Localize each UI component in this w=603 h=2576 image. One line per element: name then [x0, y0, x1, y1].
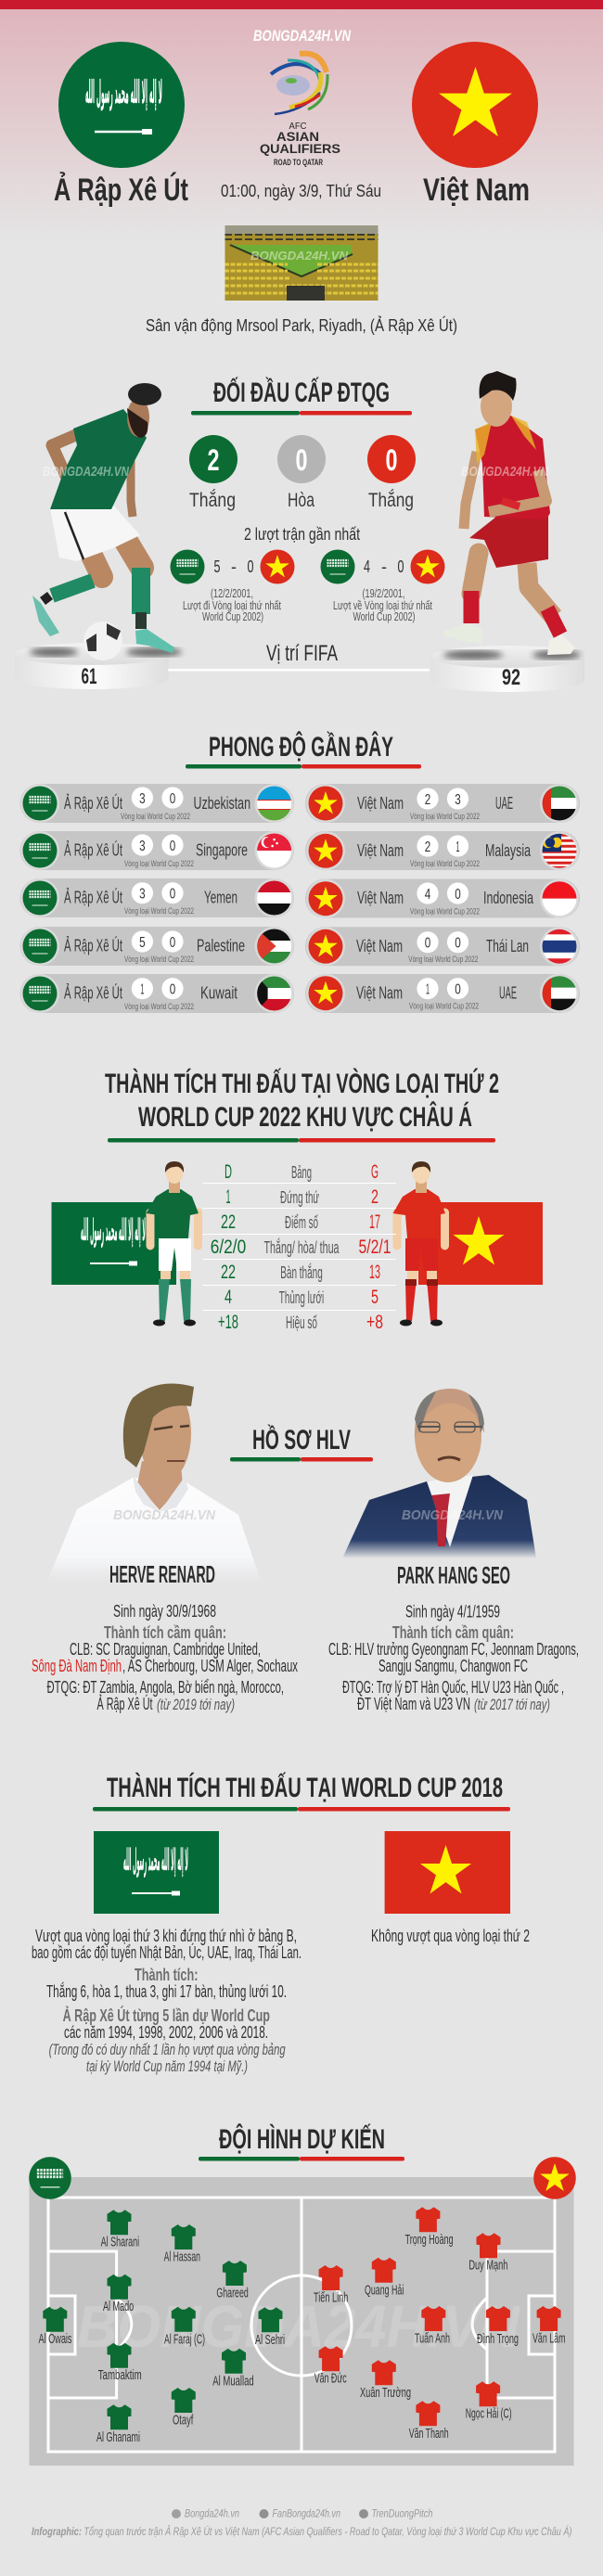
- form row: Saudi vs Uzbekistan: 3: [139, 791, 146, 807]
- form row: Saudi vs Palestine: 0: [170, 935, 175, 951]
- coach bio: Park Hang Seo: ĐT Việt Nam và U23 VN: [357, 1695, 470, 1713]
- match time: 01:00, ngày 3/9, Thứ Sáu: [221, 182, 381, 200]
- AFC Asian Qualifiers logo: [260, 54, 340, 167]
- coach bio: Herve Renard: (từ 2019 tới nay): [157, 1696, 235, 1713]
- statistics table: 22: [221, 1211, 236, 1233]
- statistics table: 4: [225, 1287, 232, 1308]
- 2018 text: Saudi Arabia: các năm 1994, 1998, 2002, 2006 và 2018.: [64, 2023, 268, 2042]
- match result 19/2/2001: (19/2/2001,: [362, 587, 404, 600]
- Vietnam player: Quang Hải: Quang Hải: [365, 2282, 404, 2298]
- text: لا إله إلا الله محمد رسول الله: [81, 1212, 146, 1249]
- coach bio: Herve Renard: ĐTQG: ĐT Zambia, Angola, Bờ biển ngà, Morocco,: [46, 1678, 284, 1697]
- 2018 text: Saudi Arabia: Vượt qua vòng loại thứ 3 khi đứng thứ nhì ở bảng B,: [35, 1927, 297, 1945]
- Vietnam player: Tuấn Anh: Tuấn Anh: [415, 2331, 450, 2347]
- flag: Vietnam: [418, 1202, 543, 1285]
- statistics table: 5: [371, 1287, 378, 1308]
- form row: Vietnam vs Malaysia: [305, 831, 580, 870]
- statistics table: +18: [218, 1312, 238, 1333]
- tally: Saudi wins: [189, 435, 237, 511]
- Vietnam player: Duy Mạnh: [468, 2233, 507, 2274]
- footer social links: Bongda24h.vn: [185, 2508, 239, 2519]
- AFC Asian Qualifiers logo: QUALIFIERS: [260, 141, 340, 156]
- form row: Saudi vs Yemen: [20, 878, 294, 917]
- Vietnam player: Tiến Linh: [314, 2265, 348, 2305]
- coach bio: Herve Renard: , AS Cherbourg, USM Alger, Sochaux: [122, 1657, 298, 1675]
- statistics table: 17: [369, 1211, 380, 1233]
- form row: Vietnam vs Malaysia: Việt Nam: [357, 841, 404, 860]
- tally: Vietnam wins: [367, 435, 416, 511]
- statistics table: Điểm số: [285, 1213, 318, 1232]
- statistics table: 6/2/0: [211, 1237, 246, 1258]
- form row: Saudi vs Kuwait: [20, 974, 294, 1013]
- heading: qualifying round 2: [105, 1068, 499, 1143]
- statistics table: Bảng: [291, 1163, 312, 1182]
- form row: Vietnam vs UAE second: Việt Nam: [356, 983, 403, 1002]
- form row: Vietnam vs Malaysia: 1: [456, 839, 460, 855]
- form row: Vietnam vs Indonesia: Indonesia: [483, 889, 534, 907]
- Saudi player: Ghareed: Ghareed: [216, 2286, 249, 2301]
- coach bio: Park Hang Seo: Sinh ngày 4/1/1959: [405, 1603, 500, 1621]
- Vietnam player: Đình Trọng: Đình Trọng: [477, 2331, 519, 2347]
- Vietnam player: Ngọc Hải: Ngọc Hải (C): [466, 2406, 512, 2422]
- coach portrait: Herve Renard: BONGDA24H.VN: [113, 1507, 216, 1523]
- lineup crest: Saudi Arabia: [29, 2157, 71, 2199]
- Vietnam player: Duy Mạnh: Duy Mạnh: [468, 2258, 507, 2274]
- footer social links: [172, 2508, 432, 2519]
- stadium photo: [225, 225, 378, 301]
- flag: Saudi Arabia: [52, 1202, 176, 1285]
- player: Vietnam: BONGDA24H.VN: [461, 464, 549, 480]
- Saudi player: Otayf: [172, 2388, 196, 2428]
- Saudi player: Al Muallad: [212, 2349, 254, 2389]
- FIFA connector line: [168, 669, 430, 672]
- tally: draws: [277, 435, 326, 511]
- form row: Vietnam vs Thailand: Vòng loại World Cup 2022: [408, 955, 478, 965]
- statistics table: Đứng thứ: [280, 1188, 319, 1207]
- Saudi player: Al Sharani: Al Sharani: [101, 2235, 139, 2250]
- FIFA ranking label: Vị trí FIFA: [266, 641, 338, 666]
- statistics table: Hiệu số: [286, 1314, 317, 1332]
- form row: Vietnam vs Thailand: 0: [425, 936, 430, 952]
- Vietnam player: Xuân Trường: Xuân Trường: [360, 2385, 411, 2401]
- AFC Asian Qualifiers logo: ASIAN: [276, 129, 319, 144]
- form row: Vietnam vs UAE: 3: [455, 792, 461, 808]
- heading: expected lineup: ĐỘI HÌNH DỰ KIẾN: [219, 2123, 385, 2155]
- 2018 text: Saudi Arabia: tại kỳ World Cup năm 1994 tại Mỹ.): [86, 2057, 248, 2075]
- football pitch: [30, 2177, 573, 2466]
- last two matches label: 2 lượt trận gần nhất: [244, 525, 360, 544]
- coach bio: Herve Renard: CLB: SC Draguignan, Cambridge United,: [70, 1640, 261, 1659]
- figure: Vietnam player: [393, 1161, 445, 1326]
- 2018 text: Vietnam: Không vượt qua vòng loại thứ 2: [371, 1927, 530, 1945]
- Vietnam player: Văn Thanh: [409, 2401, 449, 2441]
- coach bio: Park Hang Seo: [328, 1603, 579, 1713]
- Vietnam player: Quang Hải: [365, 2258, 404, 2298]
- form row: Saudi vs Palestine: 5: [139, 935, 146, 951]
- Saudi player: Ghareed: [216, 2261, 249, 2301]
- coach portrait: Herve Renard: [46, 1383, 262, 1583]
- Saudi player: Al Faraj: Al Faraj (C): [164, 2332, 205, 2348]
- Vietnam player: Trọng Hoàng: [405, 2207, 454, 2248]
- stadium photo: BONGDA24H.VN: [250, 249, 349, 263]
- footer caption: Infographic:: [32, 2527, 82, 2538]
- AFC Asian Qualifiers logo: ROAD TO QATAR: [274, 158, 323, 167]
- coach name: Herve Renard: HERVE RENARD: [109, 1560, 215, 1588]
- podium: Vietnam: [430, 646, 584, 692]
- Vietnam player: Tuấn Anh: [415, 2306, 450, 2347]
- form row: Vietnam vs UAE: Vòng loại World Cup 2022: [410, 812, 480, 822]
- coach bio: Herve Renard: Ả Rập Xê Út: [96, 1694, 152, 1713]
- Vietnam player: Văn Lâm: [532, 2306, 566, 2347]
- form row: Vietnam vs Malaysia: 2: [425, 839, 430, 855]
- statistics table: +8: [366, 1312, 383, 1333]
- coach portrait: Park Hang Seo: BONGDA24H.VN: [402, 1507, 504, 1523]
- team name: Vietnam: Việt Nam: [423, 173, 530, 208]
- form row: Vietnam vs Thailand: Thái Lan: [486, 937, 529, 955]
- header: Vietnam crest: [412, 42, 538, 168]
- match result 19/2/2001: [321, 549, 445, 623]
- flag: Vietnam 2018: [385, 1831, 510, 1914]
- stadium caption: Sân vận động Mrsool Park, Riyadh, (Ả Rập Xê Út): [146, 315, 457, 335]
- form row: Saudi vs Singapore: Singapore: [196, 840, 248, 859]
- form row: Vietnam vs Indonesia: Việt Nam: [357, 889, 404, 907]
- coach bio: Park Hang Seo: Thành tích cầm quân:: [392, 1623, 514, 1642]
- form row: Saudi vs Kuwait: 0: [170, 982, 175, 998]
- form row: Saudi vs Palestine: Ả Rập Xê Út: [64, 936, 122, 955]
- Vietnam player: Văn Lâm: Văn Lâm: [532, 2331, 566, 2347]
- tally: Saudi wins: 2: [208, 443, 219, 477]
- 2018 text: Saudi Arabia: [32, 1927, 302, 2075]
- Vietnam player: Trọng Hoàng: Trọng Hoàng: [405, 2232, 454, 2248]
- Saudi player: Al Hassan: [164, 2224, 200, 2264]
- form row: Vietnam vs Malaysia: Vòng loại World Cup 2022: [410, 859, 480, 869]
- coach name: Park Hang Seo: PARK HANG SEO: [397, 1561, 510, 1589]
- 2018 text: Saudi Arabia: Thành tích:: [135, 1966, 199, 1984]
- form row: Vietnam vs UAE second: UAE: [499, 983, 517, 1002]
- Saudi player: Tambaktim: [98, 2343, 142, 2383]
- Saudi player: Al Sharani: [101, 2210, 139, 2250]
- statistics table: 13: [369, 1262, 380, 1283]
- podium: Vietnam: 92: [502, 665, 520, 690]
- match result 12/2/2001: -: [231, 557, 237, 576]
- form row: Saudi vs Uzbekistan: Vòng loại World Cup 2022: [121, 812, 190, 822]
- form row: Saudi vs Singapore: Ả Rập Xê Út: [64, 840, 122, 859]
- heading: recent form: [186, 731, 421, 768]
- tally: Saudi wins: Thắng: [189, 490, 236, 511]
- heading: recent form: PHONG ĐỘ GẦN ĐÂY: [209, 731, 393, 763]
- Saudi player: Al Mado: Al Mado: [103, 2299, 134, 2314]
- coach bio: Park Hang Seo: (từ 2017 tới nay): [474, 1696, 550, 1713]
- form row: Vietnam vs Thailand: 0: [455, 936, 461, 952]
- form row: Vietnam vs UAE second: [305, 974, 580, 1013]
- 2018 text: Saudi Arabia: Ả Rập Xê Út từng 5 lần dự World Cup: [63, 2006, 270, 2025]
- statistics table: G: [371, 1161, 378, 1183]
- form row: Saudi vs Kuwait: 1: [140, 982, 144, 998]
- form row: Saudi vs Yemen: Vòng loại World Cup 2022: [124, 906, 194, 916]
- match result 19/2/2001: Lượt về Vòng loại thứ nhất: [333, 599, 432, 612]
- footer social links: FanBongda24h.vn: [273, 2508, 340, 2519]
- heading: World Cup 2018: [93, 1772, 510, 1811]
- match result 12/2/2001: (12/2/2001,: [211, 587, 253, 600]
- statistics table: 22: [221, 1262, 236, 1283]
- player: Saudi Arabia: [32, 383, 174, 660]
- form row: Vietnam vs UAE second: 1: [426, 982, 430, 998]
- form row: Saudi vs Kuwait: Vòng loại World Cup 2022: [124, 1002, 194, 1012]
- top red bar: [0, 0, 603, 9]
- figure: Saudi player: [147, 1161, 199, 1326]
- statistics table: 1: [226, 1186, 230, 1208]
- form row: Saudi vs Singapore: [20, 831, 294, 870]
- form row: Saudi vs Uzbekistan: Ả Rập Xê Út: [64, 793, 122, 813]
- form row: Saudi vs Yemen: Ả Rập Xê Út: [64, 887, 122, 907]
- form row: Vietnam vs UAE: UAE: [495, 794, 513, 813]
- Saudi player: Al Ghanami: Al Ghanami: [96, 2429, 140, 2445]
- podium: Saudi Arabia: [15, 643, 182, 689]
- statistics table: 5/2/1: [358, 1237, 391, 1258]
- form row: Vietnam vs UAE: Việt Nam: [357, 794, 404, 813]
- Saudi player: Al Faraj: [164, 2307, 205, 2348]
- match result 19/2/2001: World Cup 2002): [353, 610, 416, 623]
- heading: coach profile: HỒ SƠ HLV: [252, 1424, 351, 1455]
- coach bio: Herve Renard: Sinh ngày 30/9/1968: [113, 1602, 216, 1621]
- text: لا إله إلا الله محمد رسول الله: [123, 1842, 188, 1878]
- Vietnam player: Xuân Trường: [360, 2360, 411, 2401]
- top pink gradient: [0, 9, 603, 241]
- player: Vietnam: [443, 371, 575, 655]
- form row: Saudi vs Singapore: 3: [139, 839, 146, 854]
- match result 19/2/2001: 4: [364, 557, 370, 576]
- tally: Vietnam wins: Thắng: [368, 490, 414, 511]
- coach bio: Herve Renard: Thành tích cầm quân:: [104, 1623, 226, 1642]
- Saudi player: Al Muallad: Al Muallad: [212, 2373, 254, 2389]
- player: Saudi Arabia: BONGDA24H.VN: [43, 464, 130, 480]
- form row: Saudi vs Uzbekistan: 0: [170, 791, 175, 807]
- Vietnam player: Văn Đức: Văn Đức: [314, 2371, 347, 2387]
- match result 12/2/2001: 5: [213, 557, 221, 576]
- form row: Saudi vs Kuwait: Ả Rập Xê Út: [64, 983, 122, 1003]
- heading: expected lineup: [199, 2123, 404, 2161]
- form row: Saudi vs Singapore: Vòng loại World Cup 2022: [124, 859, 194, 869]
- brand logo: BONGDA24H.VN: [253, 27, 352, 45]
- team name: Saudi Arabia: Ả Rập Xê Út: [54, 173, 188, 208]
- form row: Saudi vs Palestine: Palestine: [197, 937, 245, 955]
- football pitch: BONGDA24H.VN: [77, 2293, 521, 2360]
- match result 19/2/2001: 0: [397, 557, 404, 576]
- Saudi player: Al Owais: Al Owais: [39, 2331, 72, 2347]
- Saudi player: Al Sehri: [255, 2307, 285, 2348]
- Saudi player: Al Ghanami: [96, 2404, 140, 2445]
- form row: Vietnam vs Indonesia: Vòng loại World Cup 2022: [410, 907, 480, 916]
- tally: draws: 0: [295, 443, 308, 477]
- statistics table: Thắng/ hòa/ thua: [263, 1237, 340, 1257]
- Saudi player: Al Mado: [103, 2275, 134, 2314]
- statistics table: Thủng lưới: [279, 1288, 324, 1307]
- Vietnam player: Ngọc Hải: [466, 2381, 512, 2422]
- coach bio: Herve Renard: Sông Đà Nam Định: [32, 1657, 122, 1675]
- form row: Saudi vs Palestine: [20, 927, 294, 966]
- form row: Saudi vs Uzbekistan: Uzbekistan: [193, 794, 250, 813]
- Saudi player: Tambaktim: Tambaktim: [98, 2367, 142, 2383]
- form row: Vietnam vs UAE second: Vòng loại World Cup 2022: [409, 1002, 479, 1011]
- match result 19/2/2001: -: [381, 557, 387, 576]
- statistics table: Bàn thắng: [280, 1262, 323, 1282]
- 2018 text: Saudi Arabia: Thắng 6, hòa 1, thua 3, ghi 17 bàn, thủng lưới 10.: [46, 1981, 287, 2001]
- statistics table: D: [225, 1161, 232, 1183]
- heading: head to head: ĐỐI ĐẦU CẤP ĐTQG: [213, 377, 390, 408]
- 2018 text: Saudi Arabia: bao gồm các đội tuyển Nhật Bản, Úc, UAE, Iraq, Thái Lan.: [32, 1942, 302, 1962]
- tally: draws: Hòa: [288, 490, 314, 511]
- Vietnam player: Văn Thanh: Văn Thanh: [409, 2426, 449, 2441]
- statistics table: 2: [371, 1186, 378, 1208]
- form row: Saudi vs Singapore: 0: [170, 839, 175, 854]
- form row: Vietnam vs UAE: [305, 784, 580, 823]
- form row: Vietnam vs Thailand: [305, 927, 580, 966]
- form row: Vietnam vs UAE second: 0: [455, 982, 461, 998]
- lineup crest: Vietnam: [533, 2157, 576, 2199]
- heading: head to head: [191, 377, 412, 416]
- text: لا إله إلا الله محمد رسول الله: [85, 74, 162, 111]
- Saudi player: Al Sehri: Al Sehri: [255, 2332, 285, 2348]
- 2018 text: Saudi Arabia: (Trong đó có duy nhất 1 lần họ vượt qua vòng bảng: [49, 2041, 286, 2058]
- Vietnam player: Văn Đức: [314, 2346, 347, 2387]
- footer social links: TrenDuongPitch: [371, 2508, 432, 2519]
- match result 12/2/2001: World Cup 2002): [202, 610, 263, 623]
- form row: Vietnam vs Indonesia: 4: [425, 887, 430, 903]
- match result 12/2/2001: [171, 549, 295, 623]
- tally: Vietnam wins: 0: [386, 443, 397, 477]
- form row: Vietnam vs Indonesia: 0: [455, 887, 461, 903]
- form row: Saudi vs Kuwait: Kuwait: [200, 984, 237, 1003]
- flag: Saudi Arabia 2018: [94, 1831, 219, 1914]
- match result 12/2/2001: 0: [247, 557, 254, 576]
- form row: Saudi vs Palestine: Vòng loại World Cup 2022: [124, 955, 194, 965]
- coach portrait: Park Hang Seo: [342, 1389, 536, 1558]
- form row: Vietnam vs UAE: 2: [425, 792, 430, 808]
- Saudi player: Otayf: Otayf: [173, 2412, 194, 2428]
- match result 12/2/2001: Lượt đi Vòng loại thứ nhất: [183, 599, 281, 612]
- header: Saudi Arabia crest: [58, 42, 185, 168]
- form row: Vietnam vs Malaysia: Malaysia: [485, 841, 532, 860]
- form row: Saudi vs Yemen: 3: [139, 887, 146, 903]
- AFC Asian Qualifiers logo: AFC: [289, 122, 306, 132]
- heading: coach profile: [230, 1424, 373, 1462]
- form row: Saudi vs Uzbekistan: [20, 784, 294, 823]
- podium: Saudi Arabia: 61: [82, 664, 96, 689]
- form row: Vietnam vs Thailand: Việt Nam: [356, 937, 403, 955]
- form row: Vietnam vs Indonesia: [305, 879, 580, 918]
- Saudi player: Al Hassan: Al Hassan: [164, 2249, 200, 2264]
- Vietnam player: Đình Trọng: [477, 2306, 519, 2347]
- Vietnam player: Tiến Linh: Tiến Linh: [314, 2289, 348, 2305]
- form row: Saudi vs Yemen: Yemen: [204, 889, 237, 907]
- statistics table: [202, 1161, 396, 1333]
- form row: Saudi vs Yemen: 0: [170, 887, 175, 903]
- Saudi player: Al Owais: [39, 2307, 72, 2347]
- coach bio: Herve Renard: [32, 1602, 298, 1713]
